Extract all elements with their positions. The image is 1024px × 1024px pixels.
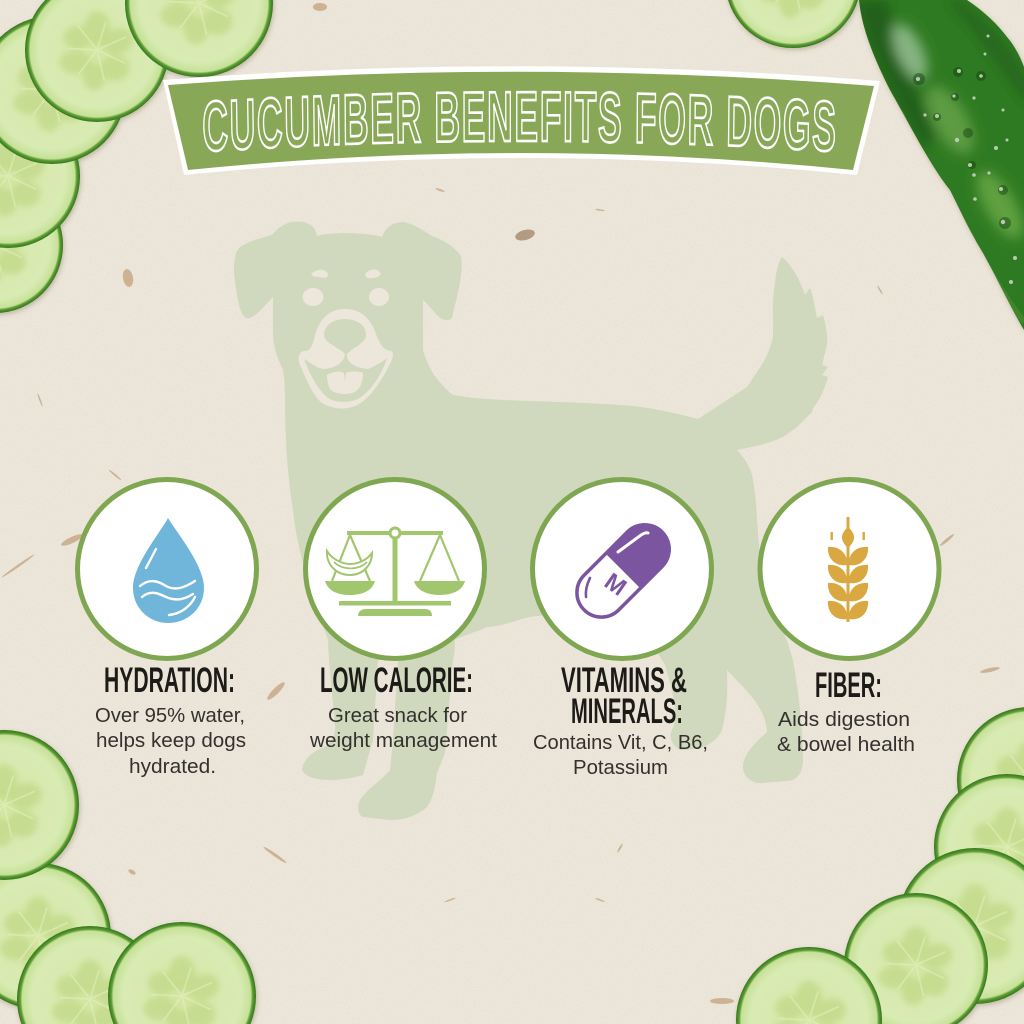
dog silhouette bbox=[234, 222, 828, 820]
icon: water drop bbox=[133, 518, 204, 623]
icon: balance scale bbox=[325, 526, 465, 616]
low calorie description: weight management bbox=[309, 730, 497, 752]
title text: CUCUMBER BENEFITS FOR DOGS bbox=[203, 90, 835, 152]
hydration description bbox=[95, 705, 246, 778]
vitamins description: Potassium bbox=[573, 757, 668, 779]
hydration circle bbox=[78, 480, 256, 658]
vitamins circle bbox=[532, 480, 712, 658]
hydration heading: HYDRATION: bbox=[104, 661, 235, 700]
low calorie heading: LOW CALORIE: bbox=[320, 661, 473, 700]
low calorie circle bbox=[306, 480, 484, 658]
panel: vitamins and minerals bbox=[532, 480, 712, 779]
dog face markings bbox=[299, 270, 393, 409]
fiber heading: FIBER: bbox=[815, 666, 882, 705]
vitamins description: Contains Vit, C, B6, bbox=[533, 732, 708, 754]
capsule letter: M bbox=[599, 568, 631, 602]
fiber circle bbox=[760, 480, 939, 658]
title banner bbox=[163, 66, 880, 175]
hydration description: hydrated. bbox=[129, 756, 216, 778]
panel: fiber bbox=[760, 480, 939, 756]
fiber description: Aids digestion bbox=[778, 709, 910, 731]
icon: wheat bbox=[828, 517, 868, 622]
hydration description: helps keep dogs bbox=[96, 730, 246, 752]
cucumber slices: bottom left bbox=[0, 730, 256, 1024]
hydration description: Over 95% water, bbox=[95, 705, 245, 727]
icon: capsule bbox=[566, 512, 682, 628]
panel: low calorie bbox=[306, 480, 497, 752]
whole cucumber bbox=[850, 0, 1024, 335]
panel: hydration bbox=[78, 480, 256, 778]
fiber description: & bowel health bbox=[777, 734, 915, 756]
fiber description bbox=[777, 709, 915, 756]
vitamins description bbox=[533, 732, 708, 779]
cucumber slices: bottom right bbox=[736, 707, 1024, 1024]
vitamins heading: MINERALS: bbox=[571, 692, 683, 731]
cucumber slices: top left bbox=[0, 0, 273, 313]
vitamins heading: VITAMINS & bbox=[561, 661, 687, 700]
cucumber slice: top bbox=[725, 0, 861, 48]
low calorie description: Great snack for bbox=[328, 705, 467, 727]
vitamins heading bbox=[561, 661, 687, 731]
low calorie description bbox=[309, 705, 497, 752]
